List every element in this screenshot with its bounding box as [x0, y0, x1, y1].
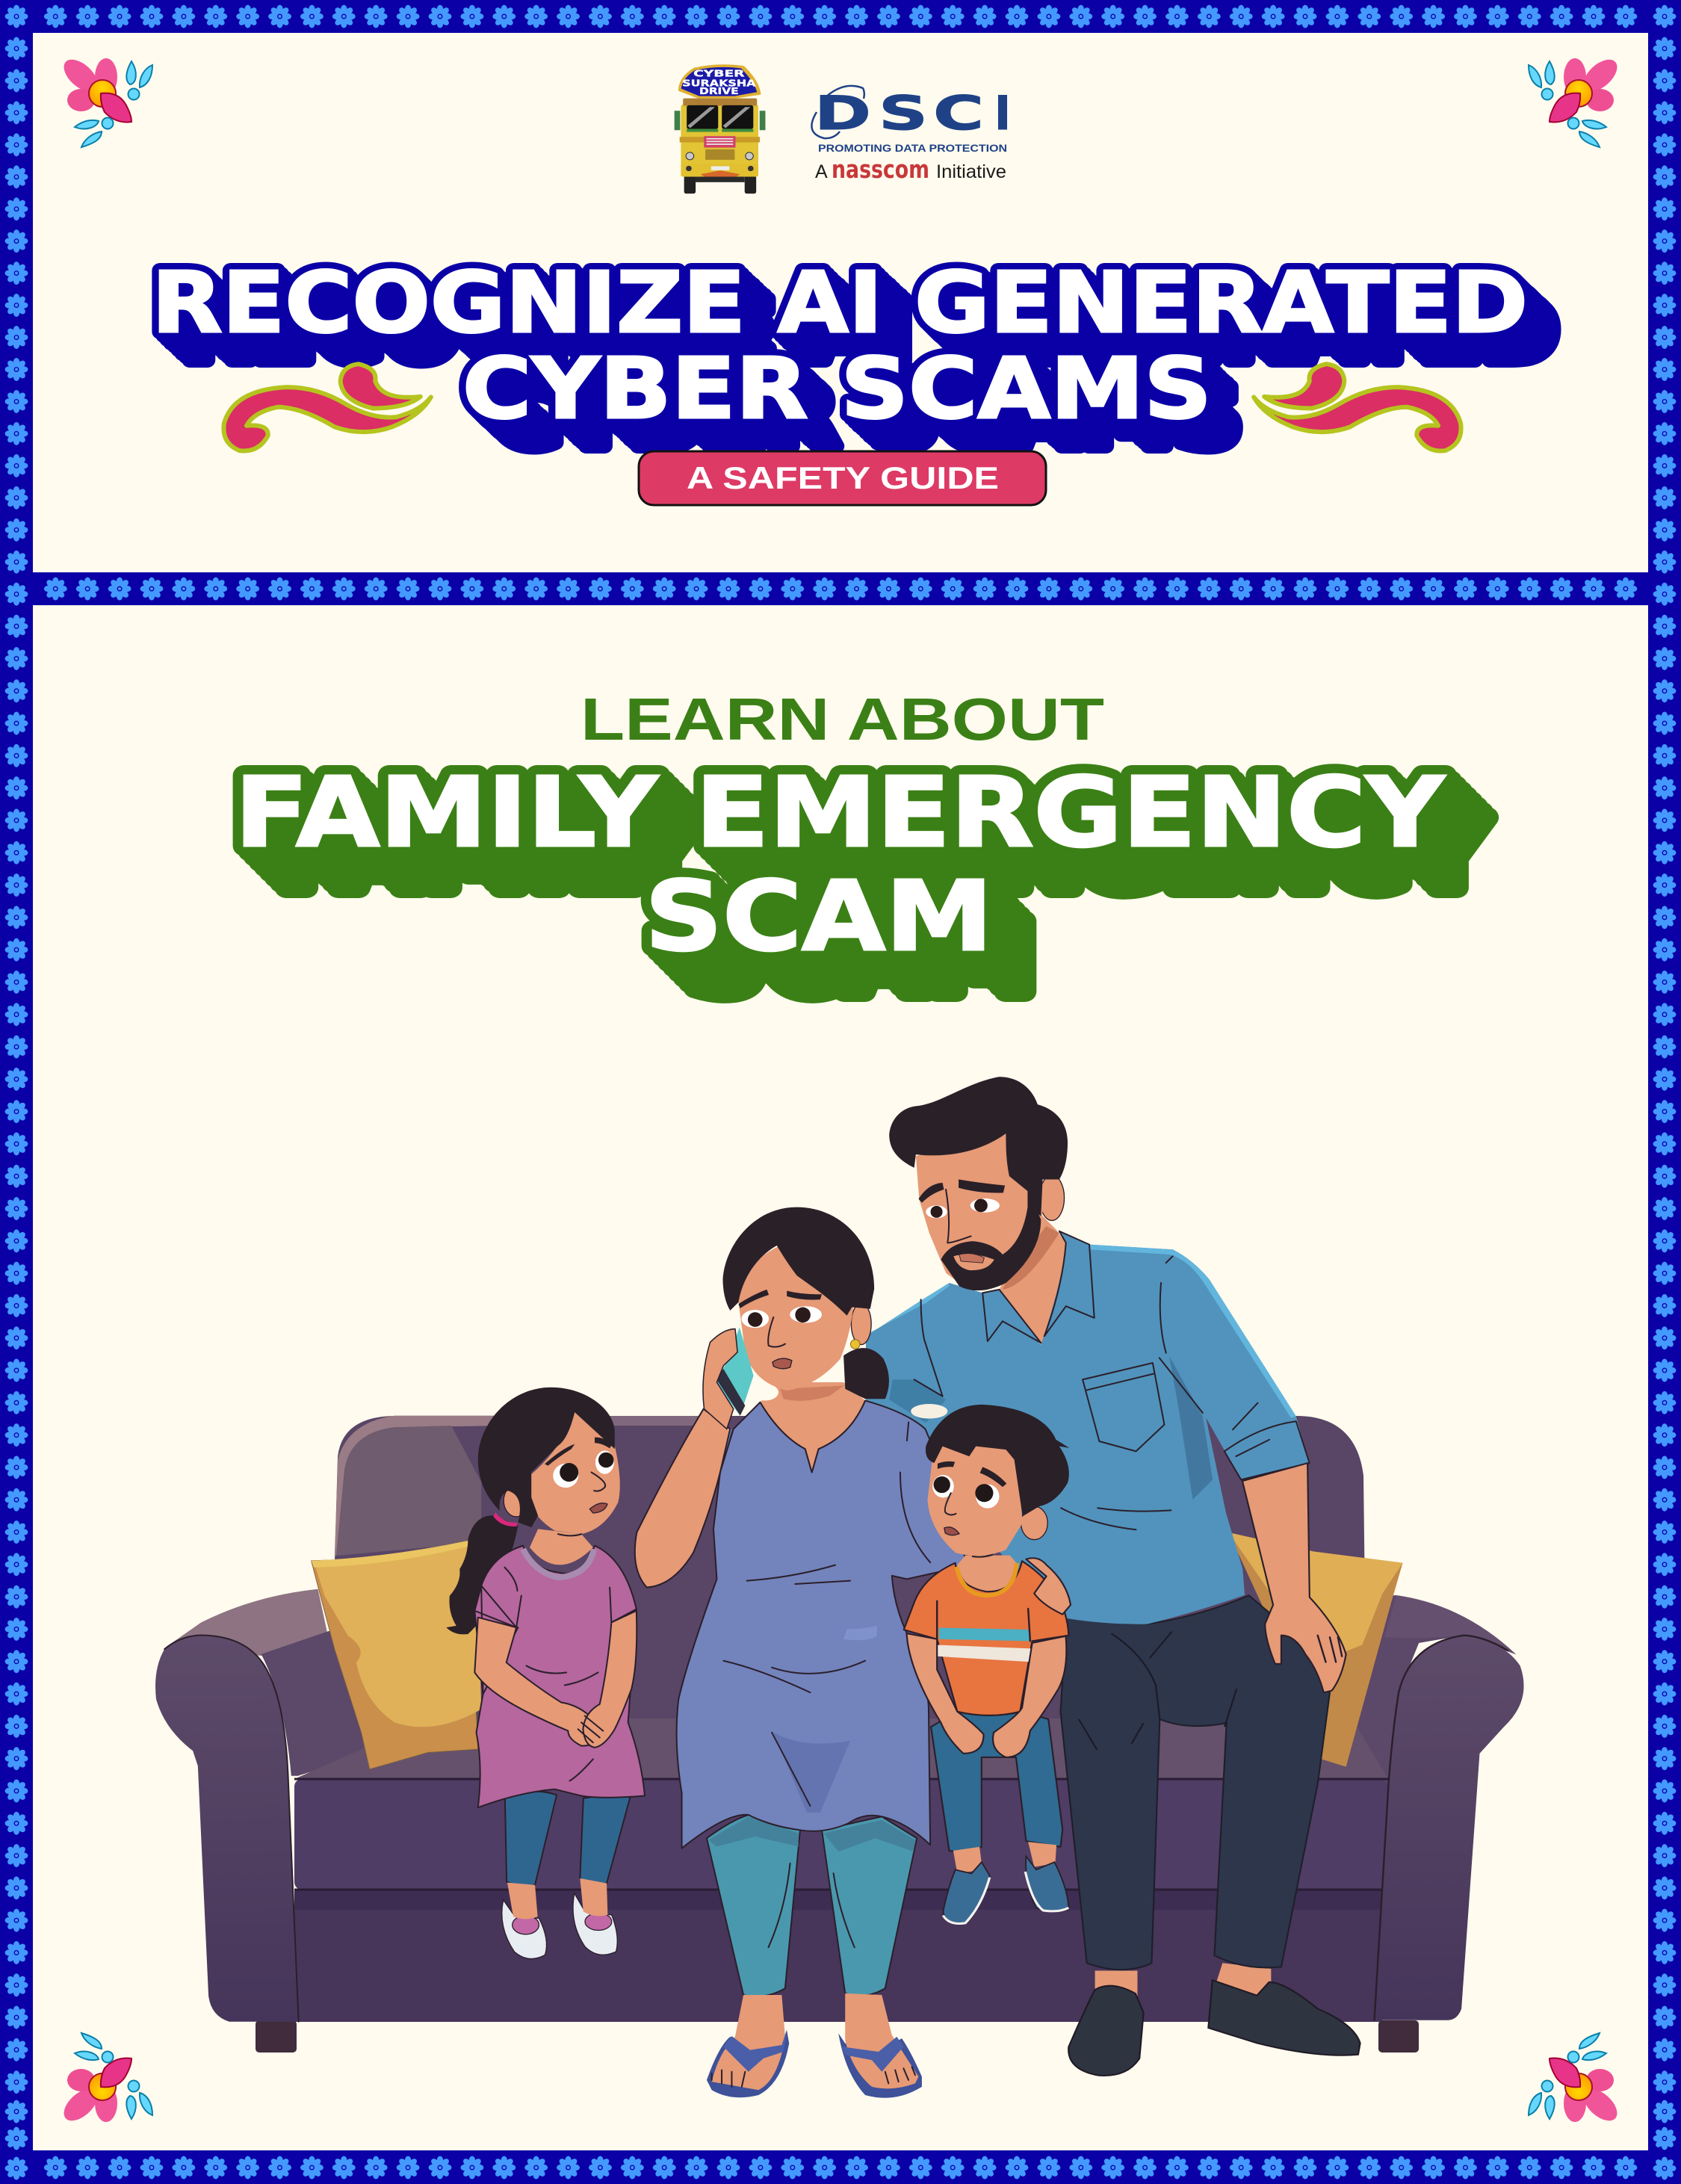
logo: DSCI: Initiative	[936, 161, 1006, 182]
heading: family emergency scam: FAMILY EMERGENCY	[235, 757, 1446, 869]
logo: Cyber Suraksha Drive truck: CYBER	[693, 69, 745, 80]
title: Recognize AI Generated Cyber Scams: CYBER SCAMS	[462, 340, 1212, 438]
mother	[635, 1207, 967, 2098]
illustration: worried family on sofa	[155, 1077, 1524, 2098]
logo: DSCI: nasscom	[832, 155, 929, 184]
arm and hand	[635, 1409, 730, 1588]
left arm	[155, 1636, 299, 2022]
man: trousers and shoes	[1061, 1595, 1360, 2076]
logo: Cyber Suraksha Drive truck: DRIVE	[699, 86, 739, 96]
boy: body	[904, 1556, 1071, 1923]
girl	[446, 1388, 645, 1959]
title: Recognize AI Generated Cyber Scams: RECOGNIZE AI GENERATED	[152, 254, 1528, 352]
neck	[999, 1213, 1066, 1345]
heading: family emergency scam: SCAM	[645, 861, 993, 973]
icon: corner flower bottom right	[1529, 2033, 1623, 2126]
heading: family emergency scam: FAMILY EMERGENCY	[235, 757, 1446, 869]
ornament: left paisley	[223, 364, 431, 451]
title: Recognize AI Generated Cyber Scams: RECOGNIZE AI GENERATED	[152, 254, 1528, 352]
heading: learn about: LEARN ABOUT	[581, 686, 1104, 752]
panel: header	[33, 33, 1648, 572]
ornament: right paisley	[1254, 364, 1461, 451]
head	[1040, 1175, 1065, 1220]
girl: legs and shoes	[502, 1792, 632, 1959]
logo: DSCI: S	[879, 86, 928, 140]
right pillow and arm	[1228, 1532, 1524, 2020]
boy: head	[926, 1405, 1069, 1557]
badge: a safety guide	[639, 451, 1046, 505]
man: shirt	[866, 1077, 1310, 1624]
icon: corner flower top right	[1529, 54, 1623, 147]
mother: raised arm, dress and head	[635, 1207, 967, 1849]
boy	[904, 1405, 1071, 1923]
heading: family emergency scam: SCAM	[645, 861, 993, 973]
man: forearm and hand	[1242, 1463, 1346, 1692]
logo: DSCI: D	[814, 86, 871, 140]
logo: Cyber Suraksha Drive truck: SURAKSHA	[682, 78, 755, 89]
left pillow	[312, 1541, 481, 1769]
logo: DSCI	[811, 86, 1011, 184]
logo: DSCI: A	[815, 161, 828, 182]
heading: family emergency scam	[235, 757, 1487, 1015]
man	[866, 1077, 1360, 2076]
badge: a safety guide: A SAFETY GUIDE	[687, 460, 999, 495]
panel: main	[33, 605, 1648, 2150]
phone	[715, 1327, 754, 1416]
logo: DSCI: PROMOTING DATA PROTECTION	[818, 142, 1007, 154]
sofa	[155, 1416, 1524, 2052]
logo: DSCI: I	[994, 86, 1011, 140]
mother: pants and sandals	[707, 1815, 922, 2098]
logo: DSCI: C	[933, 86, 984, 140]
title: Recognize AI Generated Cyber Scams: CYBER SCAMS	[462, 340, 1212, 438]
title: Recognize AI Generated Cyber Scams	[152, 254, 1558, 466]
icon: corner flower top left	[58, 54, 152, 147]
mother's hand	[1026, 1558, 1071, 1615]
girl: body and head	[446, 1388, 645, 1807]
icon: corner flower bottom left	[58, 2033, 152, 2126]
logo: Cyber Suraksha Drive truck	[675, 64, 765, 194]
